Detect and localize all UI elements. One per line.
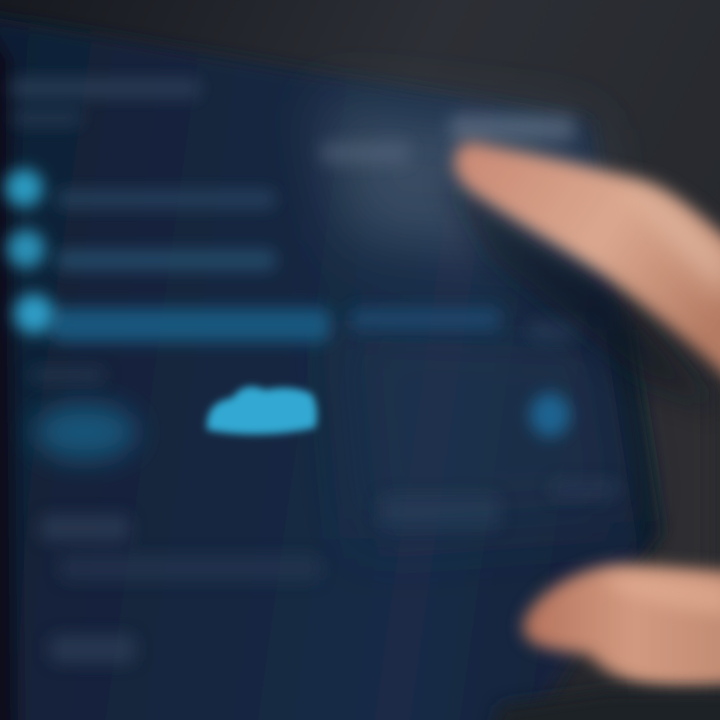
icon: bullet 3	[14, 294, 54, 334]
icon: bullet 1	[5, 169, 43, 207]
screen content: header text lines	[10, 78, 575, 164]
screen content: faint lower text lines	[30, 320, 620, 663]
icon: bullet 2	[7, 230, 45, 268]
finger highlight	[630, 185, 720, 300]
screen glare	[320, 100, 630, 540]
hand: lower fingers	[523, 564, 720, 688]
screen content: lower-left blue blob	[33, 404, 137, 460]
dark lower-right corner	[490, 690, 720, 720]
finger shadow	[445, 175, 720, 410]
screen content: right-side blue spot	[530, 393, 570, 437]
screen content: bright blue cloud shape	[207, 386, 317, 435]
hand: pointing finger	[454, 142, 720, 390]
screen content: list rows with blue bullets	[5, 169, 500, 342]
tablet edge at right	[610, 260, 720, 720]
lower finger highlight	[600, 576, 720, 615]
